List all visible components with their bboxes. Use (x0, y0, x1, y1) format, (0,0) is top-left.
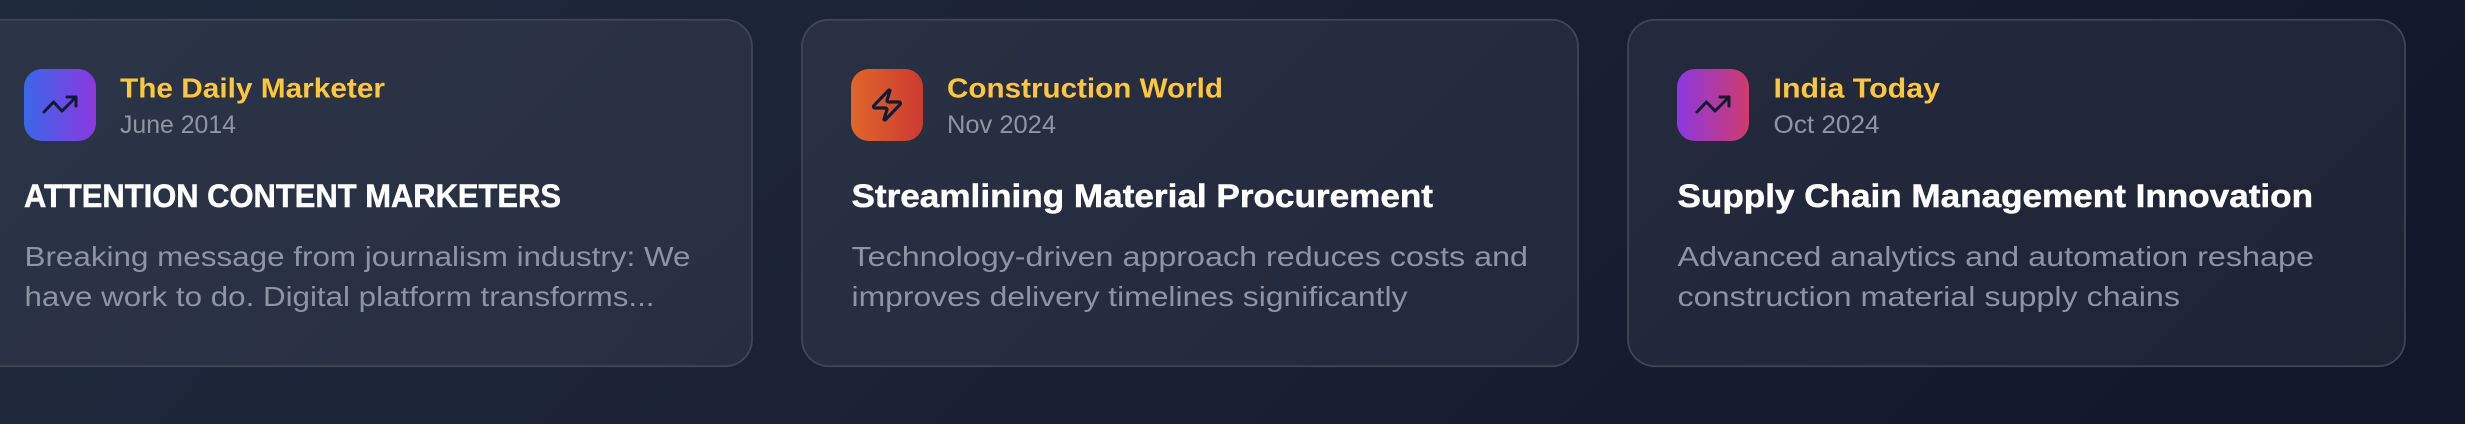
icon: trending up on blue-purple tile (24, 69, 96, 141)
description: have work to do. Digital platform transforms... (24, 281, 654, 312)
card surface (1628, 20, 2405, 366)
headline: ATTENTION CONTENT MARKETERS (24, 178, 561, 214)
panel: The Daily Marketer card (0, 20, 752, 366)
description (852, 241, 1528, 312)
description (24, 241, 690, 312)
source name: Construction World (947, 72, 1223, 104)
source name: India Today (1774, 72, 1940, 104)
icon: trending up on purple-pink tile (1677, 69, 1749, 141)
description (1678, 241, 2314, 312)
source name: The Daily Marketer (120, 72, 385, 104)
card surface (802, 20, 1578, 366)
headline: Streamlining Material Procurement (852, 178, 1433, 214)
date: June 2014 (120, 111, 236, 139)
panel: India Today card (1628, 20, 2405, 366)
date: Oct 2024 (1774, 111, 1880, 139)
icon: lightning bolt on orange-red tile (851, 69, 923, 141)
description: construction material supply chains (1678, 281, 2180, 312)
description: Technology-driven approach reduces costs and (852, 241, 1528, 272)
card surface (0, 20, 752, 366)
headline: Supply Chain Management Innovation (1678, 178, 2313, 214)
date: Nov 2024 (947, 111, 1056, 139)
description: improves delivery timelines significantly (852, 281, 1408, 312)
panel: Construction World card (802, 20, 1578, 366)
description: Breaking message from journalism industry: We (24, 241, 690, 272)
description: Advanced analytics and automation reshape (1678, 241, 2314, 272)
